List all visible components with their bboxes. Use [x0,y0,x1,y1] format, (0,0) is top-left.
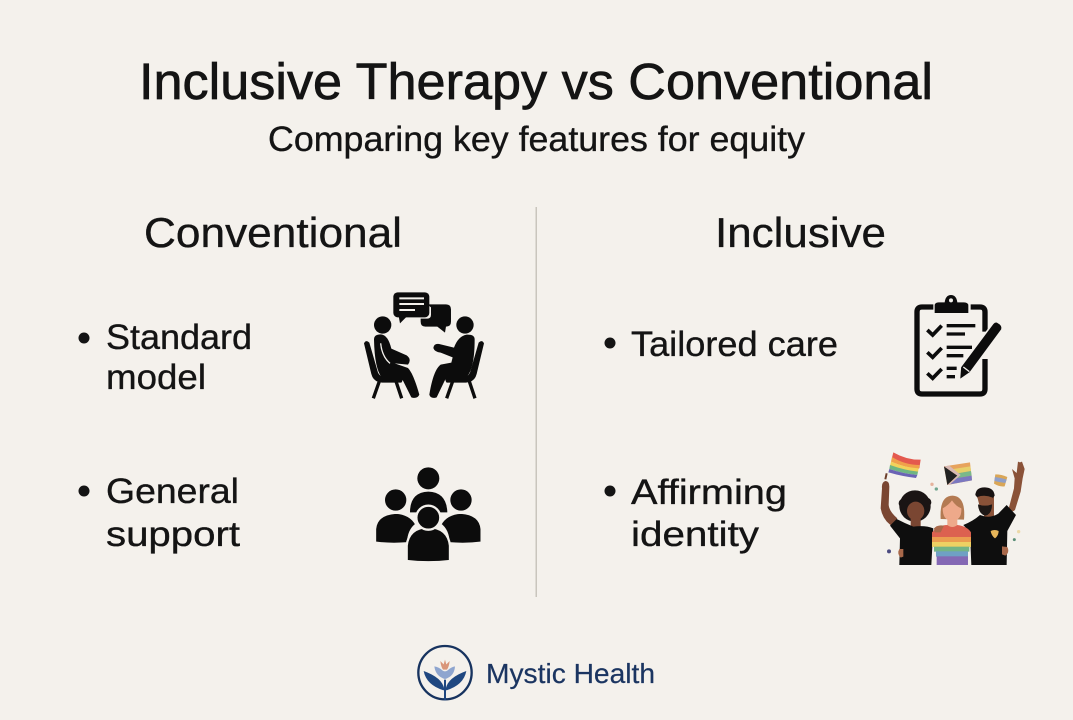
rainbow flag [885,452,921,479]
icon: two people in conversation [364,292,484,398]
bullet: tailored care: Tailored care [631,325,838,364]
logo wordmark: Mystic Health [486,658,655,689]
bullet: affirming identity [604,473,787,554]
person centre [932,496,971,565]
heading: inclusive: Inclusive [715,209,886,256]
small flag [994,474,1007,486]
bullet: affirming identity: Affirming [631,473,787,512]
logo mark [418,646,472,700]
subtitle: Comparing key features for equity [268,120,806,159]
bullet: general support [78,472,240,554]
person left [890,490,933,565]
logo: Mystic Health [418,646,655,700]
bullet: general support: support [106,515,240,554]
bullet: general support: General [106,472,239,511]
bullet: standard model: Standard [106,318,252,357]
icon: support group [375,467,481,562]
bullet: standard model: model [106,358,206,397]
icon: people celebrating with pride flags [881,452,1025,565]
bullet: standard model [78,318,252,397]
title: Inclusive Therapy vs Conventional [139,53,933,110]
raised arms [881,481,897,527]
progress flag [944,462,972,485]
bullet: affirming identity: identity [631,515,760,554]
heading: conventional: Conventional [144,209,402,256]
icon: clipboard checklist with pencil [917,295,1002,394]
person right [963,487,1016,565]
